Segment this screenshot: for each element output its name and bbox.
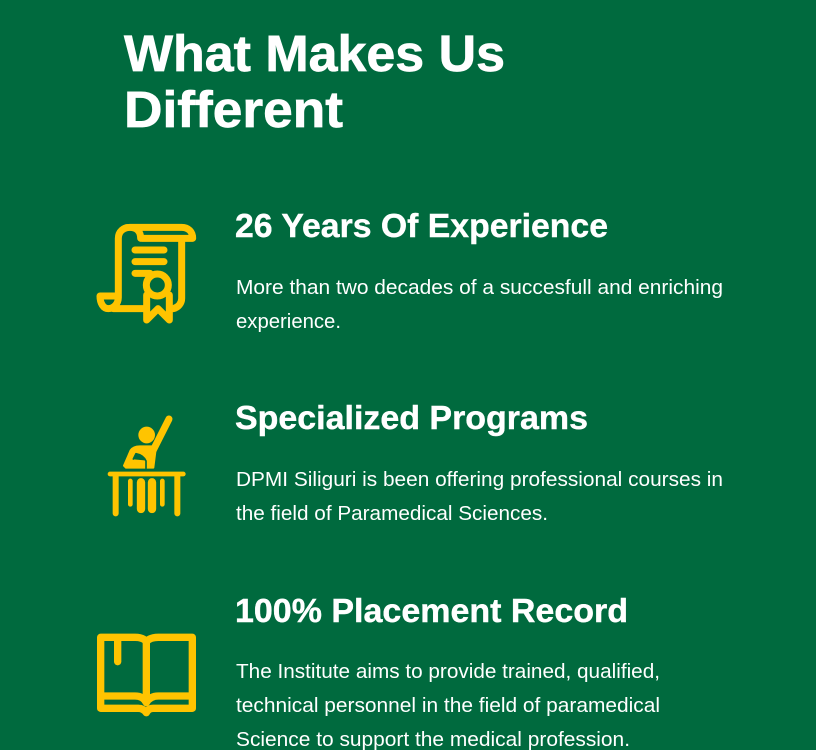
- title: Different: [124, 81, 343, 138]
- icon: diploma scroll: [100, 227, 193, 320]
- title: [124, 25, 505, 138]
- description: More than two decades of a succesfull and enriching: [236, 276, 723, 299]
- description: [236, 660, 660, 750]
- panel: programs: [110, 399, 723, 525]
- description: experience.: [236, 310, 341, 333]
- panel: placement: [101, 592, 660, 750]
- icon: student raising hand at desk: [110, 419, 183, 513]
- title: What Makes Us: [124, 25, 505, 82]
- description: the field of Paramedical Sciences.: [236, 502, 548, 525]
- heading: Specialized Programs: [235, 399, 588, 436]
- description: DPMI Siliguri is been offering professional courses in: [236, 468, 723, 491]
- heading: 26 Years Of Experience: [235, 207, 608, 244]
- icon: open book: [101, 637, 192, 713]
- panel: experience: [100, 207, 723, 333]
- description: The Institute aims to provide trained, qualified,: [236, 660, 660, 683]
- heading: 100% Placement Record: [235, 592, 628, 629]
- description: technical personnel in the field of paramedical: [236, 694, 660, 717]
- description: [236, 276, 723, 333]
- description: [236, 468, 723, 525]
